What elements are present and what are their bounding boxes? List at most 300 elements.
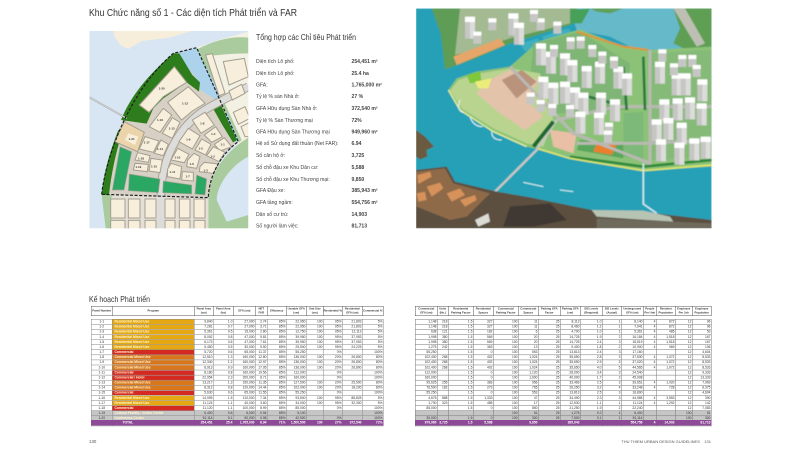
table: development plan right: 327: [487, 325, 492, 328]
table: development plan right: 2: [619, 376, 620, 379]
table: development plan left: 85%: [279, 411, 286, 415]
table: development plan left: 100%: [374, 371, 382, 374]
indicator list: Tỷ lệ % Sàn Thương mại: [256, 117, 313, 124]
table: development plan left: 0%: [337, 371, 342, 374]
table: development plan left: 6,000: [246, 411, 254, 415]
table: development plan left: 85%: [279, 325, 286, 328]
table: development plan left: 8.71: [260, 376, 266, 379]
table: development plan right: 100: [512, 325, 518, 328]
table header: left: [91, 306, 384, 316]
table header: right: Commercial Parking Factor: [496, 307, 516, 314]
table: development plan right: 100: [686, 421, 692, 425]
table: development plan right: 76,500: [426, 386, 436, 389]
table: development plan right: 1.5: [468, 345, 472, 349]
table: development plan left: 55,250: [295, 350, 306, 354]
table: development plan left: 47,000: [244, 340, 254, 344]
table: development plan right: 100: [512, 335, 518, 339]
table: development plan left: 5%: [378, 340, 382, 344]
table total row: right: 385,943: [568, 420, 580, 424]
table header: left: Commercial %: [363, 309, 382, 312]
table: development plan left: 1-3: [99, 330, 104, 333]
table: development plan right: 0.1: [597, 421, 602, 425]
table: development plan left: 85%: [279, 345, 286, 349]
table: development plan right: 956: [532, 381, 538, 384]
indicator list: Số chỗ đậu xe Khu Dân cư:: [256, 164, 319, 171]
table: development plan left: 160,000: [243, 355, 254, 359]
table: development plan right: 4: [654, 386, 656, 389]
table: development plan right: 33,469: [569, 381, 580, 384]
city: [416, 167, 712, 228]
table header: left: Unit Size (sm): [309, 307, 321, 314]
table total row: left: [91, 420, 384, 426]
table: development plan left: 65,000: [244, 391, 254, 394]
table total row: left: 25.4: [226, 420, 232, 424]
table: development plan right: 4,700: [571, 330, 580, 333]
table: development plan right: 4: [619, 386, 620, 389]
table: development plan right: 37,020: [632, 360, 642, 364]
table: development plan right: 3: [619, 360, 620, 364]
table: development plan left: Residential Mixed Use: [114, 320, 149, 323]
table: development plan left: 100%: [374, 350, 382, 354]
table: development plan left: 1-1: [99, 320, 104, 323]
table: development plan left: 1-17: [98, 401, 105, 405]
table: development plan left: 5.81: [260, 335, 266, 339]
table: development plan right: 96: [707, 320, 710, 323]
table: development plan right: 33,248: [632, 386, 642, 389]
table: development plan left: 127,500: [294, 381, 306, 384]
table: development plan left: 42,500: [295, 416, 306, 420]
table: development plan left: Commercial Mixed Use: [114, 365, 151, 369]
table: development plan right: 25: [556, 365, 560, 369]
table: development plan right: 85,000: [426, 406, 436, 410]
table: development plan right: 1,333: [484, 396, 492, 400]
table: development plan right: 300: [532, 416, 538, 420]
table: development plan left: 160,000: [294, 376, 306, 379]
table: development plan right: 850: [532, 406, 538, 410]
table: development plan right: 25: [556, 416, 560, 420]
table: development plan left: 95%: [335, 335, 342, 339]
table: development plan right: 1: [619, 411, 620, 415]
table: development plan left: 100,000: [243, 406, 254, 410]
table: development plan right: 45,908: [632, 376, 642, 379]
indicator list: 254,451 m²: [352, 59, 378, 65]
block labels: 1-2: [211, 155, 215, 159]
table: development plan left: 2.74: [260, 320, 266, 323]
table: development plan left: 37,953: [351, 335, 362, 339]
table: development plan right: 3: [619, 340, 620, 344]
table: development plan right: 0: [491, 406, 492, 410]
table: development plan left: Commercial / Hotel: [114, 376, 144, 379]
table: development plan left: 1-21: [98, 421, 105, 425]
table: development plan right: [415, 319, 712, 426]
table: development plan right: 121: [442, 330, 448, 333]
table: development plan right: 55,250: [426, 391, 436, 394]
table header: right: SIS Levels (Actual): [605, 307, 619, 314]
table: development plan left: 14.44: [258, 386, 266, 389]
table: development plan right: 25: [556, 391, 560, 394]
table: development plan right: 1.5: [468, 355, 472, 359]
table: development plan right: 1,072: [666, 360, 674, 364]
table: development plan right: 25: [556, 330, 560, 333]
table: development plan right: 402: [487, 355, 492, 359]
table: development plan right: 14,725: [569, 340, 580, 344]
block labels: 1-14: [157, 147, 163, 151]
table: development plan right: 12: [688, 406, 692, 410]
table: development plan left: 0%: [337, 376, 342, 379]
table: development plan left: 1.0: [228, 320, 232, 323]
table: development plan left: 0.8: [228, 371, 232, 374]
table: development plan left: Cultural Facility - Visitor Center: [114, 411, 164, 415]
table: development plan left: 1.3: [228, 381, 232, 384]
table: development plan right: 4: [654, 320, 656, 323]
table: development plan left: 14,995: [202, 396, 212, 400]
indicator list: Số căn hộ ở:: [256, 152, 285, 159]
table: development plan left: 100: [317, 386, 322, 389]
table total row: right: 9,850: [529, 420, 538, 424]
table: development plan left: 19.56: [258, 371, 266, 374]
table: development plan right: 1.5: [468, 406, 472, 410]
table: development plan left: 2.3: [228, 376, 232, 379]
table: development plan left: 100: [317, 345, 322, 349]
table: development plan right: 167: [705, 335, 710, 339]
table: development plan right: 100: [512, 376, 518, 379]
table: development plan right: 106: [705, 345, 710, 349]
table: development plan right: 28,000: [569, 371, 580, 374]
table: development plan right: 3: [619, 355, 620, 359]
indicator list: 14,903: [352, 212, 367, 218]
block labels: 1-13: [169, 127, 175, 131]
table: development plan right: 4: [654, 330, 656, 333]
table: development plan right: 25: [556, 325, 560, 328]
table: development plan right: 969: [669, 345, 674, 349]
table: development plan left: 22,950: [295, 325, 306, 328]
table: development plan right: 242: [442, 345, 448, 349]
table: development plan left: 0.6: [228, 411, 232, 415]
table: development plan right: 100: [512, 345, 518, 349]
table: development plan left: 0.5: [228, 330, 232, 333]
table: development plan left: 5,450: [204, 345, 212, 349]
table: development plan left: 100: [317, 381, 322, 384]
table: development plan right: 2.4: [597, 340, 602, 344]
table: development plan left: 85%: [279, 335, 286, 339]
table: development plan right: 363: [487, 345, 492, 349]
table: development plan right: 1,020: [666, 381, 674, 384]
table: development plan left: Commercial Mixed Use: [114, 355, 151, 359]
block labels: 1-1: [221, 142, 225, 146]
table: development plan right: 3: [619, 350, 620, 354]
table: development plan left: 100: [317, 355, 322, 359]
table: development plan left: 55,250: [295, 391, 306, 394]
table: development plan right: 3: [619, 391, 620, 394]
block labels: 1-11: [169, 170, 176, 174]
table: development plan left: 20%: [335, 360, 342, 364]
table: development plan right: 53: [707, 330, 710, 333]
table: development plan right: 102,400: [425, 365, 436, 369]
table: development plan right: 22,240: [632, 406, 642, 410]
table: development plan left: 0.8: [228, 386, 232, 389]
indicator list: 385,943 m²: [352, 188, 378, 194]
table: development plan left: [91, 319, 384, 426]
table: development plan left: 100: [317, 360, 322, 364]
indicator list: 5,588: [352, 165, 364, 171]
table: development plan left: 11.35: [258, 381, 266, 384]
table: development plan right: 2.5: [597, 381, 602, 384]
table total row: right: 1.5: [468, 420, 472, 424]
table: development plan right: 24,540: [632, 371, 642, 374]
table: development plan left: 13,217: [202, 381, 212, 384]
table: development plan left: 5,361: [204, 330, 212, 333]
table: development plan left: 6,173: [204, 340, 212, 344]
table header: left: Residential GFA (sm): [345, 307, 360, 314]
table: development plan right: 2.4: [597, 350, 602, 354]
table: development plan right: 100: [512, 406, 518, 410]
table total row: right: 81,713: [700, 420, 710, 424]
indicator list: [256, 59, 382, 230]
table: development plan right: 100: [512, 340, 518, 344]
table header: right: Parking GFA (sm): [562, 307, 579, 314]
indicator list: GFA tầng ngầm:: [256, 200, 293, 206]
table: development plan right: 1.5: [468, 381, 472, 384]
table: development plan left: 1-20: [98, 416, 105, 420]
table: development plan left: 100: [317, 365, 322, 369]
table: development plan right: 765: [532, 386, 538, 389]
table: development plan right: 1,275: [571, 411, 580, 415]
table header: right: Units (No.): [439, 307, 446, 314]
table: development plan right: 1,292: [666, 401, 674, 405]
bridge road: [89, 97, 127, 118]
table: development plan right: 12: [688, 350, 692, 354]
table: development plan right: 100: [512, 401, 518, 405]
table: development plan right: 1.5: [468, 376, 472, 379]
table: development plan right: 1.9: [597, 406, 602, 410]
table: development plan right: 100: [686, 411, 692, 415]
indicator list: GFA Hữu dụng Sàn Thương mại: [256, 130, 330, 136]
table: development plan left: 65,000: [244, 350, 254, 354]
table: development plan right: 26,250: [569, 386, 580, 389]
table: development plan left: 17.95: [258, 365, 266, 369]
table: development plan left: 25,500: [295, 345, 306, 349]
table: development plan right: 16,184: [632, 335, 642, 339]
table: development plan left: 200,000: [243, 376, 254, 379]
table: development plan left: 21,803: [351, 320, 362, 323]
table: development plan right: 3: [619, 371, 620, 374]
heading: development plan: Kế hoạch Phát triển: [89, 294, 150, 304]
table: development plan right: 11: [534, 325, 538, 328]
table: development plan right: 872: [669, 320, 674, 323]
indicator list: 554,756 m²: [352, 200, 378, 206]
indicator list: 72%: [352, 118, 362, 124]
table: development plan right: 1: [619, 416, 620, 420]
table: development plan right: 30,000: [426, 416, 436, 420]
table: development plan left: Commercial: [114, 350, 133, 354]
table: development plan left: 22,950: [295, 320, 306, 323]
table: development plan left: 1.3: [228, 355, 232, 359]
table: development plan right: 888: [442, 396, 448, 400]
table: development plan left: 24,225: [351, 345, 362, 349]
table: development plan left: Residential Mixed Use: [114, 345, 149, 349]
bridges: [494, 119, 558, 192]
table: development plan left: 11.37: [258, 350, 266, 354]
indicator list: Tỷ lệ % sàn Nhà ở:: [256, 93, 300, 100]
table: development plan left: 85%: [279, 391, 286, 394]
table header: right: Employee Per Job: [677, 307, 690, 314]
table: development plan right: 17,160: [632, 350, 642, 354]
table: development plan left: 1-12: [98, 376, 105, 379]
table: development plan left: 25,500: [351, 381, 362, 384]
table: development plan right: 102,400: [425, 360, 436, 364]
table: development plan right: 485: [669, 330, 674, 333]
table: development plan left: 7.61: [260, 340, 266, 344]
table: development plan right: 102,400: [425, 355, 436, 359]
table: development plan left: Conference Center: [114, 416, 144, 420]
table: development plan left: 20%: [335, 381, 342, 384]
table: development plan left: 100%: [374, 411, 382, 415]
table: development plan right: 2.3: [597, 396, 602, 400]
table: development plan left: 100%: [374, 376, 382, 379]
table: development plan left: 3.60: [260, 401, 266, 405]
table: development plan left: 120,000: [243, 386, 254, 389]
green park blocks: [112, 147, 207, 195]
table: development plan right: 12: [688, 381, 692, 384]
indicator list: 372,540 m²: [352, 106, 378, 112]
table: development plan left: 160,000: [243, 360, 254, 364]
table: development plan left: 1-5: [99, 340, 104, 344]
table: development plan left: 85%: [279, 330, 286, 333]
table: development plan left: 93,500: [295, 396, 306, 400]
table: development plan left: 30,000: [244, 345, 254, 349]
table: development plan left: Commercial: [114, 371, 133, 374]
table: development plan right: 20: [534, 335, 538, 339]
table: development plan right: 100: [512, 360, 518, 364]
table: development plan right: 1.5: [468, 401, 472, 405]
table: development plan left: 88,825: [351, 396, 362, 400]
table: development plan right: 4: [654, 355, 656, 359]
table: development plan left: 100%: [374, 416, 382, 420]
table: development plan right: 4: [654, 335, 656, 339]
table: development plan right: 1,120: [529, 371, 538, 374]
table: development plan right: 569: [487, 335, 492, 339]
table: development plan right: 100: [512, 320, 518, 323]
table: development plan right: 2.9: [597, 360, 602, 364]
table total row: right: 554,756: [631, 420, 642, 424]
table: development plan left: 2.80: [260, 330, 266, 333]
table header: left: Residential %: [324, 309, 342, 312]
table: development plan left: Cultural Facility - Opera House: [114, 421, 163, 425]
table: development plan left: 85%: [279, 355, 286, 359]
table: development plan right: 25: [556, 411, 560, 415]
table: development plan left: 1.5: [228, 421, 232, 425]
table: development plan left: 32,300: [351, 401, 362, 405]
table: development plan right: 402: [487, 365, 492, 369]
table: development plan right: 51: [534, 411, 538, 415]
table: development plan left: 8,913: [204, 365, 212, 369]
table: development plan right: 3.2: [597, 386, 602, 389]
table: development plan right: 1,063: [571, 421, 580, 425]
table: development plan left: 1-8: [99, 355, 104, 359]
dark green parks: [121, 53, 200, 124]
table: development plan right: 1,275: [428, 345, 436, 349]
table: development plan right: 12: [688, 391, 692, 394]
table: development plan left: 85%: [279, 340, 286, 344]
table: development plan right: 12,530: [569, 401, 580, 405]
table: development plan left: 100: [317, 320, 322, 323]
table total row: left: 6.94: [260, 420, 266, 424]
block labels: 1-4: [211, 132, 216, 136]
left shore: [416, 130, 434, 159]
table: development plan right: 35,650: [569, 360, 580, 364]
table: development plan right: 100: [512, 391, 518, 394]
table: development plan right: 569: [487, 340, 492, 344]
table: development plan right: 0: [491, 371, 492, 374]
indicator list: 27 %: [352, 94, 364, 100]
block labels: 1-7: [186, 175, 190, 179]
table: development plan right: 380: [442, 340, 448, 344]
site plan map: [89, 31, 252, 230]
table header: right: People Per Unit: [644, 307, 655, 314]
table: development plan right: 12: [688, 325, 692, 328]
table: development plan left: 12,750: [295, 330, 306, 333]
table: development plan left: 100: [317, 396, 322, 400]
table: development plan left: 160,000: [243, 365, 254, 369]
main boulevard: [161, 87, 248, 197]
table: development plan right: 2: [619, 345, 620, 349]
table: development plan right: 402: [487, 360, 492, 364]
table: development plan left: 100%: [374, 421, 382, 425]
table: development plan right: 25: [556, 350, 560, 354]
table: development plan left: 160,000: [243, 371, 254, 374]
table: development plan right: 553: [532, 350, 538, 354]
table: development plan left: 37,953: [351, 340, 362, 344]
table header: left: Efficiency: [270, 309, 283, 312]
table: development plan left: 1-2: [99, 325, 104, 328]
table: development plan left: 85%: [279, 350, 286, 354]
table: development plan right: 327: [487, 320, 492, 323]
table: development plan left: 1.2: [228, 360, 232, 364]
table: development plan right: 7,941: [634, 325, 642, 328]
table: development plan left: 5,720: [204, 350, 212, 354]
indicator list: 9,850: [352, 177, 364, 183]
table: development plan left: 8,312: [204, 386, 212, 389]
table: development plan left: 22,954: [202, 376, 212, 379]
table: development plan left: 8,180: [204, 371, 212, 374]
table: development plan right: 15,226: [632, 421, 642, 425]
table: development plan left: 18,200: [351, 386, 362, 389]
block labels: 1-12: [182, 101, 188, 105]
table: development plan right: 7,083: [702, 406, 710, 410]
table: development plan left: 80%: [376, 355, 382, 359]
table: development plan right: 39,651: [632, 381, 642, 384]
block labels: 1-9: [186, 137, 191, 141]
table: development plan left: 0%: [337, 416, 342, 420]
table: development plan right: 9,400: [571, 345, 580, 349]
table: development plan left: 80%: [376, 360, 382, 364]
table total row: left: 71%: [279, 420, 286, 424]
table: development plan left: 112,000: [294, 371, 306, 374]
table: development plan right: 100: [512, 330, 518, 333]
table: development plan right: 51,114: [633, 416, 642, 420]
table: development plan right: 1: [619, 330, 620, 333]
table: development plan right: 12: [688, 401, 692, 405]
table: development plan right: 1.8: [597, 345, 602, 349]
table total row: left: 72%: [376, 420, 382, 424]
table: development plan left: 12.97: [258, 360, 266, 364]
table: development plan right: 12: [688, 360, 692, 364]
table header: left: Panel Area (sm): [197, 307, 211, 314]
table: development plan right: 51: [707, 411, 710, 415]
table: development plan right: 4,604: [702, 391, 710, 394]
table total row: right: 14,903: [664, 420, 674, 424]
table: development plan left: 85%: [279, 381, 286, 384]
